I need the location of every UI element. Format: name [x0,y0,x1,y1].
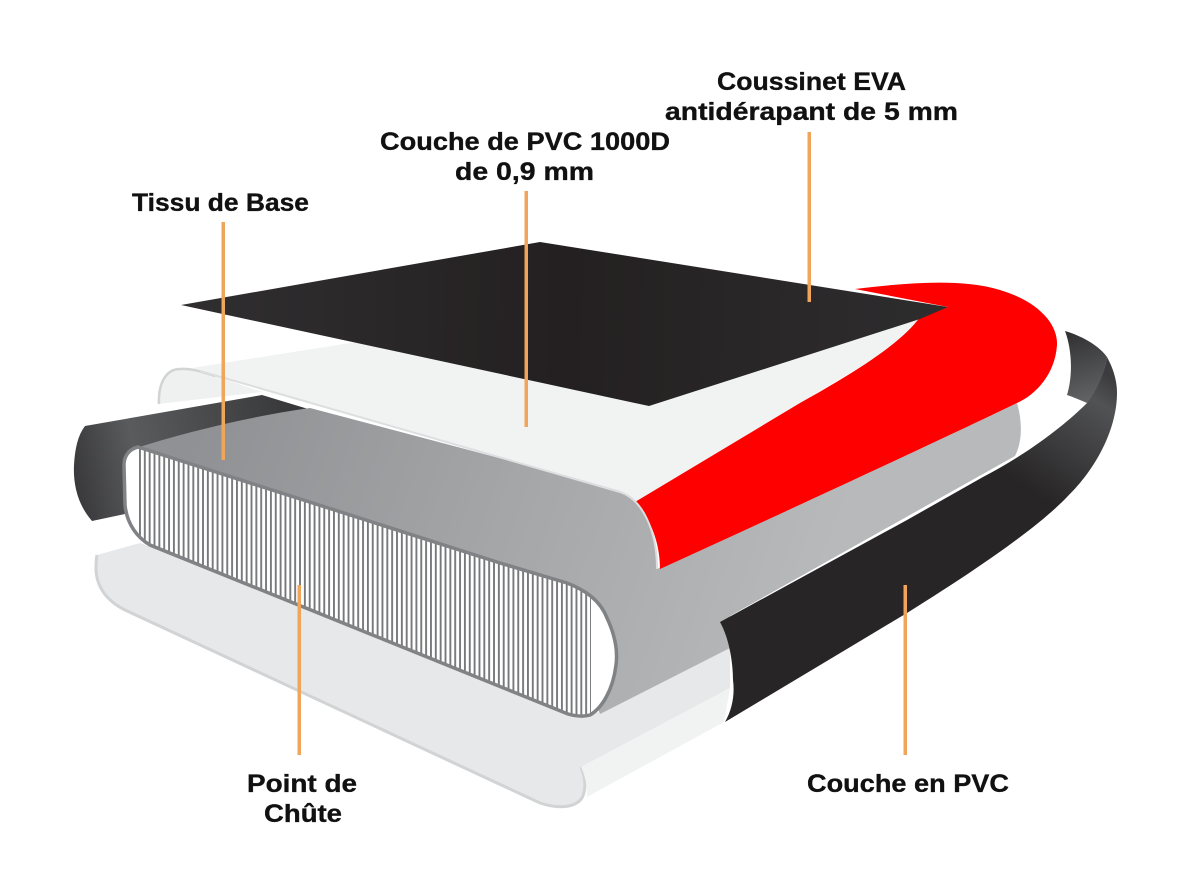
lower base sheet [96,543,730,807]
rear PVC layer, left end [74,395,318,521]
label: Coussinet EVA: antidérapant de 5 mm [665,98,958,126]
label: Point de Chûte: Point de [247,770,357,798]
label: Point de Chûte [247,770,357,828]
leader line: Tissu de Base [222,222,225,460]
board cross-section infographic [74,72,1117,822]
top white sheet [192,315,925,502]
leader line: Point de Chûte [298,585,301,755]
dark 1000D PVC sheet [181,242,948,406]
top sheet edge [200,371,657,569]
leader line: Coussinet EVA [808,132,811,302]
label: Couche de PVC 1000D [380,128,670,186]
label: Coussinet EVA [665,68,958,126]
rear PVC layer, right end [1065,331,1107,403]
label: Coussinet EVA: Coussinet EVA [717,68,906,96]
label: Couche de PVC 1000D: de 0,9 mm [455,158,594,186]
grey drop-stitch core [127,403,1021,714]
lower sheet border [96,555,585,807]
label: Couche en PVC: Couche en PVC [807,770,1009,798]
lower sheet light strip [581,688,730,797]
leader line: Couche de PVC [524,191,528,427]
red EVA traction pad [635,283,1057,569]
drop-stitch window [124,440,617,725]
label: Tissu de Base: Tissu de Base [132,189,309,217]
leader line: Couche en PVC [904,585,907,755]
top sheet flap [158,368,262,404]
label: Point de Chûte: Chûte [264,800,342,828]
flap border [159,369,215,404]
label: Couche de PVC 1000D: Couche de PVC 1000D [380,128,670,156]
front PVC band [720,357,1117,722]
